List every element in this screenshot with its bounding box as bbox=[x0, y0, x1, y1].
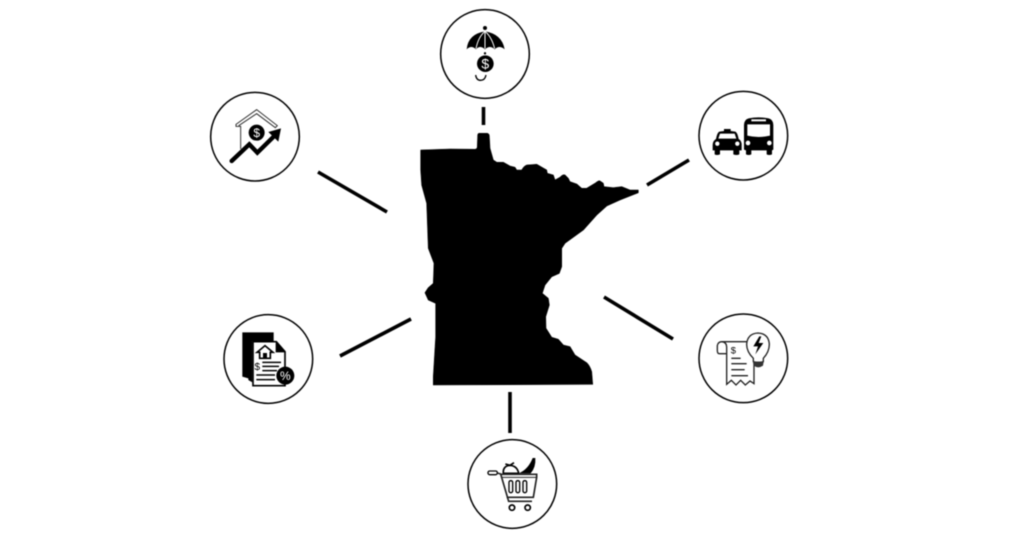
icon: grocery cart bbox=[468, 440, 557, 528]
bus bbox=[744, 117, 773, 155]
icon: insurance umbrella: $ bbox=[481, 56, 489, 72]
icon: mortgage and property tax document: $ bbox=[255, 362, 261, 373]
icon: housing cost rising: $ bbox=[253, 126, 260, 140]
taxi bbox=[713, 129, 742, 155]
icon: insurance umbrella bbox=[441, 10, 529, 98]
icon: utility bill and light bulb bbox=[699, 314, 788, 403]
icon: taxi and bus bbox=[699, 91, 788, 180]
map: Minnesota silhouette bbox=[421, 133, 638, 385]
connector lines bbox=[318, 107, 689, 433]
icon: utility bill and light bulb: $ bbox=[731, 346, 737, 356]
icon: housing cost rising bbox=[211, 92, 299, 181]
icon: mortgage and property tax document: % bbox=[280, 369, 291, 383]
icon: mortgage and property tax document bbox=[224, 315, 313, 403]
